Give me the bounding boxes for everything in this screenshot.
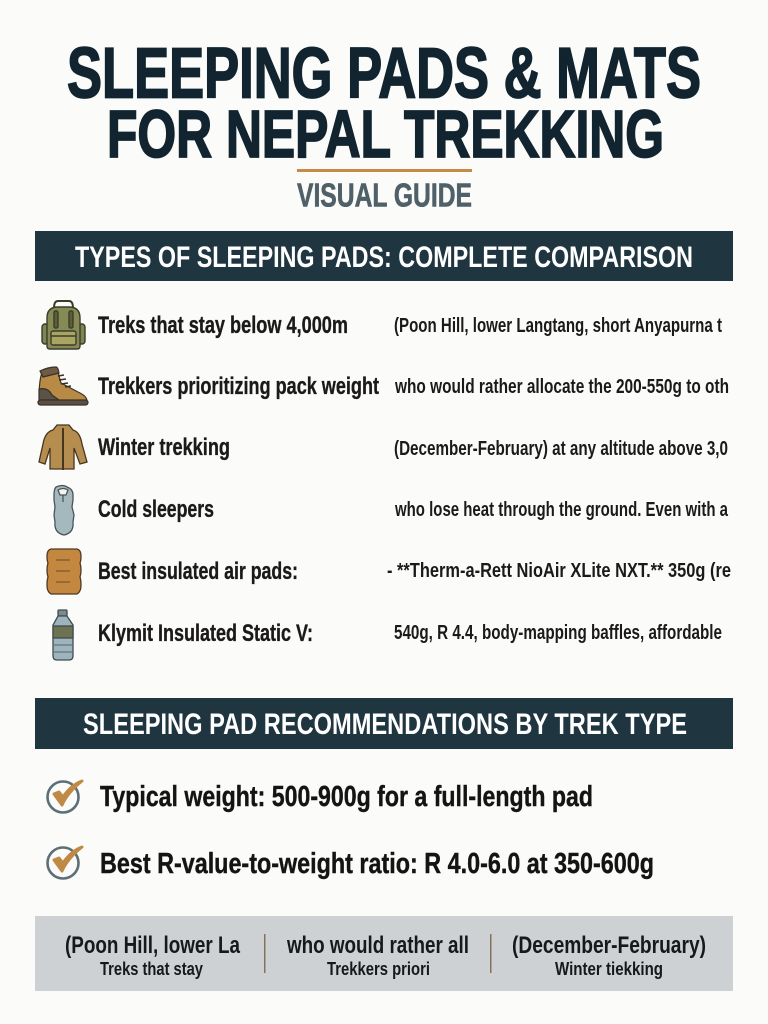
- summary column 2: who would rather all: [286, 932, 469, 959]
- row labels: Best insulated air pads:: [98, 558, 298, 585]
- row labels: Trekkers prioritizing pack weight: [98, 373, 379, 400]
- checklist item: typical weight: Typical weight: 500-900g for a full-length pad: [100, 781, 593, 813]
- icon: sleeping bag: [54, 486, 74, 535]
- checklist item: best R-value-to-weight ratio: Best R-value-to-weight ratio: R 4.0-6.0 at 350-600g: [100, 848, 654, 880]
- icon: jacket: [39, 425, 87, 470]
- title: [67, 34, 701, 172]
- row labels: [98, 312, 379, 647]
- row labels: Winter trekking: [98, 434, 230, 461]
- summary column 3: [512, 932, 706, 979]
- section banner: recommendations by trek type: [35, 698, 733, 749]
- summary column 1: [65, 932, 241, 979]
- title accent rule: [297, 169, 472, 172]
- section banner: types of sleeping pads: [35, 231, 733, 281]
- summary column 1: (Poon Hill, lower La: [65, 932, 241, 959]
- icon: backpack: [42, 301, 85, 349]
- icon: check mark: [48, 847, 82, 878]
- subtitle: VISUAL GUIDE: [297, 176, 472, 214]
- footer summary band: [35, 916, 733, 991]
- row descriptions: [387, 314, 731, 644]
- icon: check mark: [48, 781, 82, 812]
- summary column 3: Winter tiekking: [555, 958, 663, 979]
- panel: comparison rows: [38, 301, 731, 660]
- row labels: Klymit Insulated Static V:: [98, 620, 313, 647]
- row labels: Cold sleepers: [98, 496, 214, 523]
- summary column 2: Trekkers priori: [327, 958, 430, 979]
- row labels: Treks that stay below 4,000m: [98, 312, 348, 339]
- summary column 3: (December-February): [512, 932, 706, 959]
- summary column 1: Treks that stay: [100, 958, 204, 979]
- icon: water bottle: [53, 610, 73, 660]
- icon: rolled sleeping pad: [47, 549, 81, 594]
- summary column 2: [286, 932, 469, 979]
- icon: hiking boot: [38, 367, 88, 405]
